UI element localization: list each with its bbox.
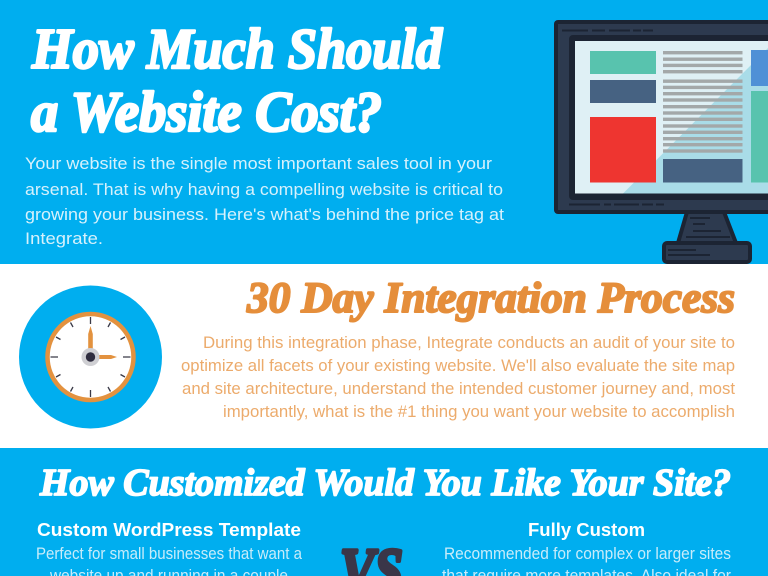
intro text: arsenal. That is why having a compelling website is critical to <box>25 181 503 199</box>
option: custom wordpress template: Perfect for small businesses that want a <box>36 545 303 563</box>
integration description: and site architecture, understand the intended customer journey and, most <box>182 380 735 398</box>
integration description: During this integration phase, Integrate conducts an audit of your site to <box>203 334 735 352</box>
integration description: optimize all facets of your existing website. We'll also evaluate the site map <box>181 357 735 375</box>
integration description <box>181 334 735 421</box>
option: custom wordpress template <box>36 520 303 576</box>
intro text: growing your business. Here's what's behind the price tag at <box>25 206 504 224</box>
title: a Website Cost? <box>31 81 382 144</box>
icon: computer monitor <box>554 20 768 262</box>
integration description: importantly, what is the #1 thing you want your website to accomplish <box>223 403 735 421</box>
title <box>31 18 443 144</box>
heading: 30 day integration process: 30 Day Integration Process <box>246 275 735 322</box>
intro text <box>25 155 504 248</box>
icon: clock <box>19 286 162 428</box>
title: How Much Should <box>31 18 443 81</box>
heading: how customized: How Customized Would You Like Your Site? <box>39 462 731 504</box>
intro text: Your website is the single most important sales tool in your <box>25 155 493 173</box>
option: fully custom: Fully Custom <box>528 520 645 540</box>
option: custom wordpress template: Custom WordPress Template <box>37 520 301 540</box>
option: fully custom <box>442 520 731 576</box>
panel: 30 day integration process <box>0 264 768 448</box>
option: fully custom: Recommended for complex or larger sites <box>444 545 731 563</box>
intro text: Integrate. <box>25 230 103 248</box>
